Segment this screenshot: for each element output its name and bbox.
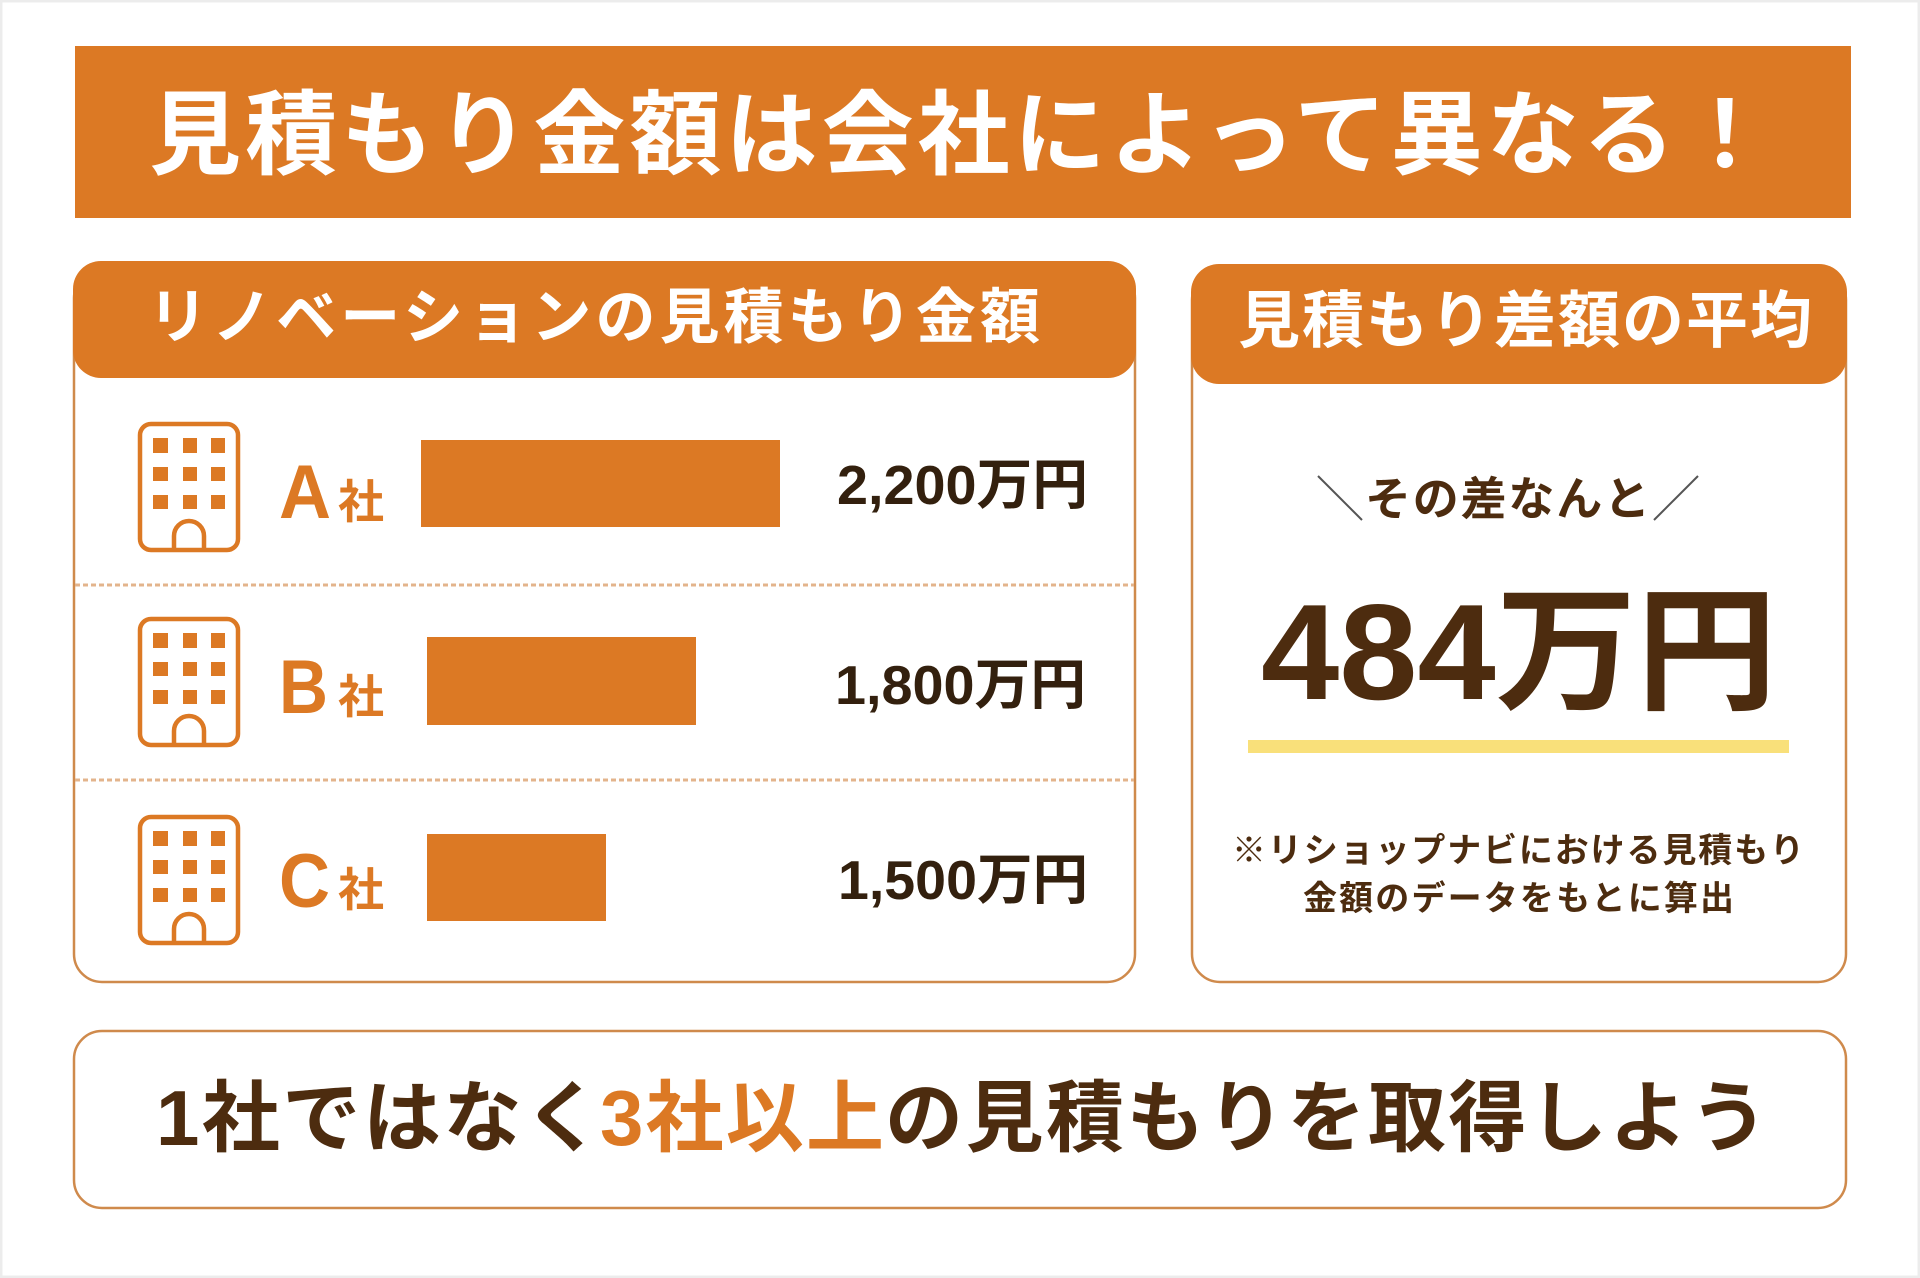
row: company B <box>140 619 1086 745</box>
bar: C <box>427 834 606 921</box>
value: A: 2,200万円 <box>837 454 1088 516</box>
title: 見積もり金額は会社によって異なる！ <box>149 85 1771 187</box>
conclusion text: の見積もりを取得しよう <box>885 1074 1768 1162</box>
conclusion text: 3社以上 <box>600 1074 884 1162</box>
icon: building A <box>140 424 238 550</box>
icon: building B <box>140 619 238 745</box>
conclusion text <box>156 1074 1768 1162</box>
bar: B <box>427 637 696 725</box>
bar: A <box>421 440 780 527</box>
value: B: 1,800万円 <box>835 654 1086 716</box>
label: A社: A <box>279 450 331 535</box>
title banner <box>75 46 1851 218</box>
key number: 484万円 <box>1261 576 1777 728</box>
panel heading <box>73 261 1136 378</box>
row: company C <box>140 817 1088 943</box>
yellow underline <box>1248 740 1789 753</box>
lead text: その差なんと <box>1365 473 1650 525</box>
footnote <box>1232 832 1804 918</box>
label: B社: 社 <box>338 671 384 723</box>
panel heading: リノベーションの見積もり金額 <box>148 284 1040 351</box>
label: C社: 社 <box>338 864 384 916</box>
row dividers <box>75 585 1134 780</box>
row: company A <box>140 424 1088 550</box>
panel: average difference <box>1191 264 1847 982</box>
panel heading <box>1191 264 1847 384</box>
label: B社 <box>279 645 384 730</box>
conclusion text: 1社ではなく <box>156 1074 602 1162</box>
footnote: ※リショップナビにおける見積もり <box>1232 832 1804 870</box>
label: C社 <box>279 839 384 924</box>
value: C: 1,500万円 <box>838 849 1088 911</box>
label: C社: C <box>279 839 330 924</box>
label: A社 <box>279 450 384 535</box>
footnote: 金額のデータをもとに算出 <box>1303 879 1734 918</box>
panel heading: 見積もり差額の平均 <box>1238 287 1812 356</box>
label: A社: 社 <box>338 476 384 528</box>
panel: estimate amounts <box>73 261 1136 982</box>
icon: building C <box>140 817 238 943</box>
label: B社: B <box>279 645 328 730</box>
panel: conclusion <box>74 1031 1846 1208</box>
